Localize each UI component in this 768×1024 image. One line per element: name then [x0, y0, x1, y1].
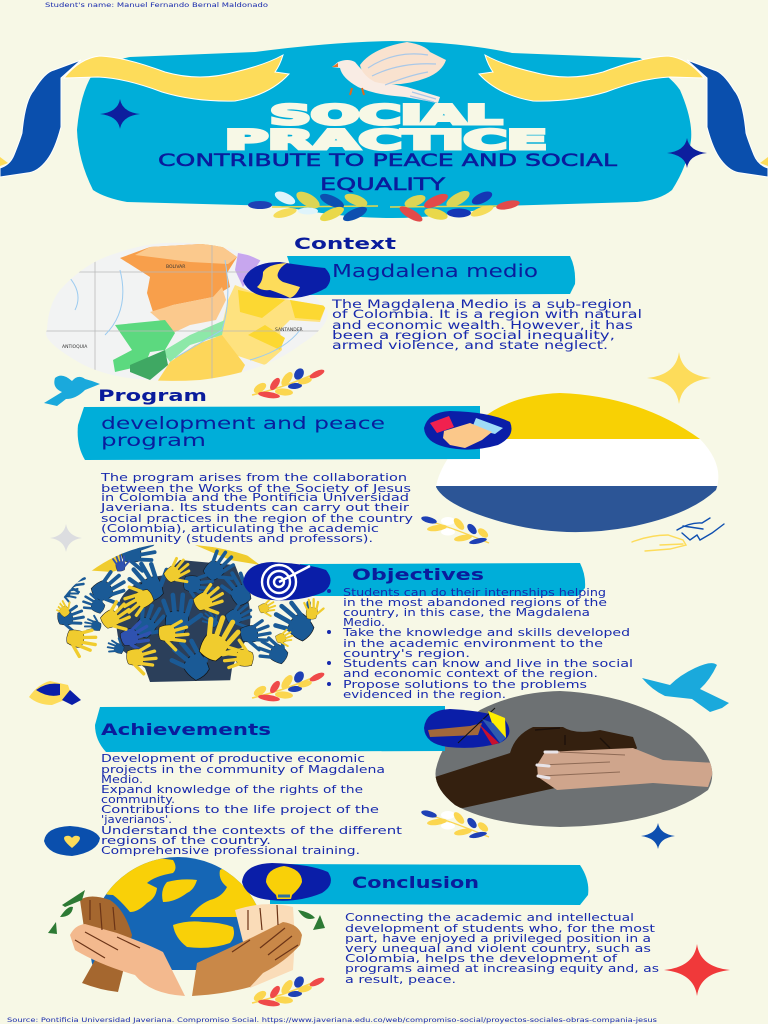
list: objectives: country, in this case, the Magdalena	[343, 607, 590, 619]
text: conclusion: Connecting the academic and intellectual	[345, 912, 634, 924]
band title: Conclusion	[352, 873, 479, 892]
panel: development and peace program: program	[101, 431, 206, 450]
text: program: Javeriana. Its students can carry out their	[100, 502, 410, 514]
icon: sprig blue	[420, 809, 490, 839]
band	[95, 706, 445, 752]
icon: Colombia map	[243, 262, 330, 298]
image: joined hands photo	[430, 688, 720, 830]
text: achievements: Comprehensive professional training.	[101, 845, 360, 857]
icon: blue star	[641, 823, 675, 849]
icon: globe heart	[44, 826, 100, 856]
icon: handshake	[424, 411, 512, 450]
text: context: The Magdalena Medio is a sub-region	[331, 298, 632, 311]
list: objectives: evidenced in the region.	[343, 689, 506, 701]
text: conclusion: very unequal and violent country, such as	[345, 943, 651, 955]
context map: ANTIOQUIA	[62, 344, 88, 350]
text: context: and economic wealth. However, it has	[332, 319, 633, 332]
student name: Student's name: Manuel Fernando Bernal Maldonado	[45, 1, 268, 9]
text: program: The program arises from the collaboration	[100, 472, 407, 484]
right yellow ribbon	[479, 55, 704, 101]
context map	[40, 240, 335, 385]
text: context: armed violence, and state neglect.	[332, 339, 608, 352]
heading: program: Program	[98, 386, 207, 405]
text: achievements: regions of the country.	[101, 835, 271, 847]
band title: Achievements	[101, 720, 271, 739]
icon: blue bird right	[642, 663, 729, 712]
list: objectives: Students can know and live in the social	[343, 658, 633, 670]
text: achievements: 'javerianos'.	[101, 814, 172, 826]
star right	[667, 138, 707, 168]
band title: Magdalena medio	[332, 261, 538, 282]
front hand right	[192, 922, 302, 996]
text: achievements: Development of productive economic	[101, 753, 365, 765]
text: conclusion: a result, peace.	[345, 974, 456, 986]
header banner: PRACTICE	[225, 125, 547, 156]
band	[300, 563, 585, 596]
header banner	[0, 41, 768, 224]
dove	[332, 42, 446, 103]
icon: fist	[29, 681, 81, 705]
list: objectives: Take the knowledge and skills developed	[342, 627, 630, 639]
text: achievements: Expand knowledge of the rights of the	[101, 784, 363, 796]
band	[78, 406, 480, 460]
right blue ribbon	[687, 60, 768, 177]
ribbon ends	[0, 157, 768, 166]
text: program: between the Works of the Society of Jesus	[101, 483, 411, 495]
icon: sprig blue	[420, 515, 490, 545]
leaves left	[248, 188, 378, 224]
panel: conclusion	[242, 863, 588, 905]
text: achievements: Contributions to the life project of the	[101, 804, 379, 816]
band	[270, 864, 588, 905]
text: conclusion: part, have enjoyed a privileged position in a	[345, 933, 651, 945]
text: context	[331, 298, 642, 352]
band title: development and peace	[101, 414, 385, 433]
list: objectives: Students can do their internships helping	[343, 587, 606, 599]
band	[287, 256, 575, 295]
source: Source: Pontificia Universidad Javeriana. Compromiso Social. https://www.javeriana.edu.co/web/compromiso-social/proyectos-sociales-obras-compania-jesus	[7, 1016, 658, 1024]
leaves right	[390, 188, 521, 224]
context map: SANTANDER	[275, 327, 303, 333]
panel: development and peace program	[78, 406, 512, 460]
icon: sprig	[252, 975, 326, 1008]
title: SOCIAL	[270, 100, 502, 131]
context map: BOLIVAR	[166, 264, 185, 270]
image: flag blob	[436, 393, 718, 532]
text: program	[100, 472, 413, 545]
finger lines	[75, 900, 298, 960]
text: context: been a region of social inequality,	[332, 329, 615, 342]
front hand left	[70, 924, 185, 996]
left blue ribbon	[0, 60, 81, 177]
list: objectives: Medio.	[343, 617, 385, 629]
heading: context: Context	[294, 234, 397, 253]
icon: target	[243, 562, 331, 600]
small leaves	[48, 890, 325, 934]
image: hands tree	[53, 537, 325, 685]
list: objectives: in the academic environment to the	[343, 638, 603, 650]
panel: achievements	[95, 706, 509, 752]
icon: blue bird	[44, 376, 100, 406]
list: objectives: and economic context of the region.	[343, 668, 598, 680]
text: achievements: projects in the community of Magdalena	[101, 764, 385, 776]
text: achievements: Understand the contexts of the different	[101, 825, 402, 837]
star left	[100, 99, 140, 129]
text: conclusion: programs aimed at increasing equity and, as	[345, 963, 659, 975]
text: conclusion: Colombia, helps the development of	[345, 953, 617, 965]
header banner: EQUALITY	[320, 175, 446, 195]
subtitle: CONTRIBUTE TO PEACE AND SOCIAL	[158, 151, 618, 171]
text: program: community (students and professors).	[101, 533, 373, 545]
panel: objectives	[243, 562, 585, 600]
left yellow ribbon	[64, 55, 289, 101]
text: program: social practices in the region of the country	[101, 513, 413, 525]
text: conclusion: development of students who, for the most	[345, 923, 655, 935]
list: objectives: in the most abandoned regions of the	[343, 597, 607, 609]
icon: red star	[664, 944, 730, 996]
text: achievements: community.	[101, 794, 175, 806]
list: objectives	[327, 587, 633, 701]
icon: yellow star	[647, 352, 711, 404]
icon: gray star	[50, 524, 82, 552]
text: program: in Colombia and the Pontificia Universidad	[101, 492, 409, 504]
list: objectives: country's region.	[343, 648, 470, 660]
band title: Objectives	[352, 565, 484, 584]
text: context: of Colombia. It is a region with natural	[332, 308, 642, 321]
text: conclusion	[345, 912, 659, 986]
text: achievements	[101, 753, 402, 857]
icon: sprig	[252, 670, 326, 703]
panel: magdalena medio	[243, 256, 575, 298]
text: achievements: Medio.	[101, 774, 143, 786]
banner background	[77, 41, 691, 218]
icon: hand with flag	[424, 708, 509, 748]
icon: sprig	[252, 367, 326, 400]
icon: line hands	[632, 518, 724, 551]
text: program: (Colombia), articulating the academic	[101, 523, 379, 535]
image: hands holding globe	[48, 855, 325, 996]
back hands	[80, 896, 132, 992]
list: objectives: Propose solutions to the problems	[343, 679, 587, 691]
icon: light bulb	[242, 863, 331, 901]
